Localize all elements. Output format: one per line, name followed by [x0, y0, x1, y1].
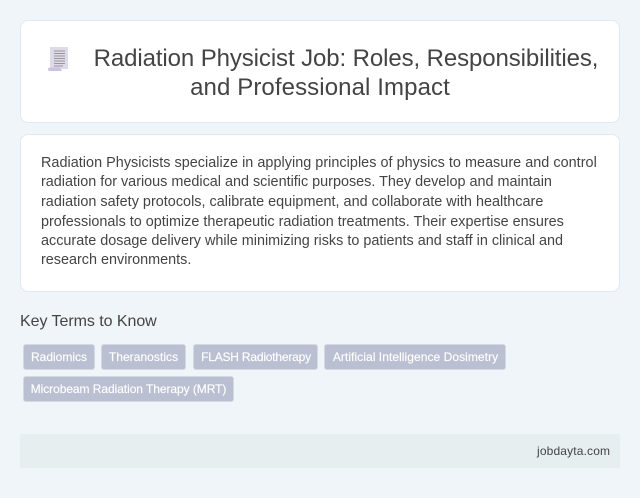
tag: Radiomics: Radiomics — [31, 350, 87, 364]
tag: Microbeam Radiation Therapy — [23, 376, 234, 402]
tag: Microbeam Radiation Therapy: Microbeam Radiation Therapy (MRT) — [31, 382, 226, 396]
tag: Radiomics — [23, 344, 95, 370]
icon: document scroll — [48, 47, 68, 71]
description text: radiation safety protocols, calibrate equipment, and collaborate with healthcare — [41, 194, 543, 210]
heading: key terms: Key Terms to Know — [20, 313, 157, 330]
tag group: key terms — [23, 344, 506, 402]
title: Radiation Physicist Job: Roles, Responsibilities, — [94, 45, 598, 72]
tag: Theranostics — [101, 344, 186, 370]
footer bar — [20, 434, 620, 468]
title — [94, 45, 598, 101]
title: and Professional Impact — [190, 74, 450, 101]
tag: Artificial Intelligence Dosimetry — [324, 344, 506, 370]
footer text: jobdayta.com — [537, 444, 610, 458]
panel: description card — [20, 134, 620, 292]
tag: Artificial Intelligence Dosimetry: Artificial Intelligence Dosimetry — [333, 350, 498, 364]
tag: FLASH Radiotherapy — [193, 344, 318, 370]
description text: Radiation Physicists specialize in applying principles of physics to measure and control — [41, 155, 597, 171]
tag: FLASH Radiotherapy: FLASH Radiotherapy — [201, 350, 311, 364]
tag: Theranostics: Theranostics — [109, 350, 178, 364]
description text: professionals to optimize therapeutic radiation treatments. Their expertise ensures — [41, 214, 564, 230]
description text — [41, 155, 597, 268]
description text: radiation for various medical and scientific purposes. They develop and maintain — [41, 174, 552, 190]
description text: research environments. — [41, 252, 191, 268]
panel: header card — [20, 20, 620, 123]
description text: accurate dosage delivery while minimizing risks to patients and staff in clinical and — [41, 233, 563, 249]
